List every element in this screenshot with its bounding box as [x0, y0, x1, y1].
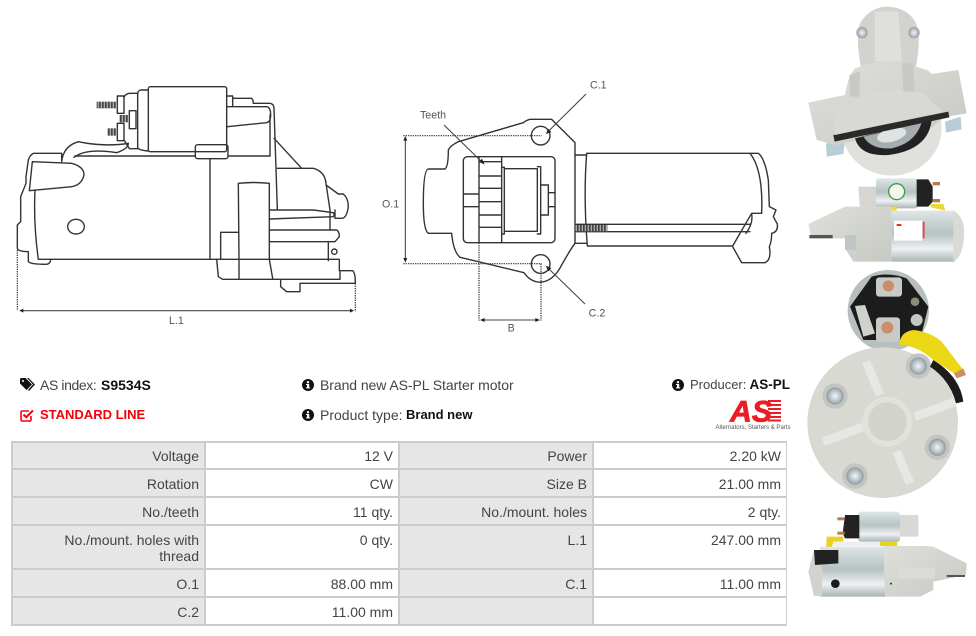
row: teeth and mounting holes: 11 qty. [353, 504, 393, 520]
row: rotation and size B: CW [370, 476, 393, 492]
callout C.2: C.2 [589, 308, 605, 320]
AS index: AS index: [40, 377, 96, 393]
flange [423, 119, 575, 282]
row: rotation and size B: Rotation [147, 476, 199, 492]
callout C.1 [546, 80, 607, 134]
row: teeth and mounting holes: No./teeth [142, 504, 199, 520]
row: teeth and mounting holes [13, 498, 786, 524]
product type: Brand new [406, 407, 472, 422]
row: threaded holes and L.1: 0 qty. [360, 532, 393, 548]
logo: AS-PL: Alternators, Starters & Parts [716, 425, 790, 431]
mounting holes [531, 126, 550, 273]
producer: AS-PL [750, 377, 790, 392]
product description: Brand new AS-PL Starter motor [320, 377, 514, 393]
row: voltage and power: Voltage [152, 448, 199, 464]
row: threaded holes and L.1: thread [159, 548, 199, 564]
logo: AS-PL [716, 398, 790, 431]
standard line badge: STANDARD LINE [40, 407, 145, 422]
icon: info [672, 379, 684, 391]
icon: info [302, 379, 314, 391]
row: voltage and power [13, 443, 786, 468]
row: C.2: C.2 [177, 604, 199, 620]
photo: side view lower [808, 512, 967, 597]
dimension O.1: O.1 [382, 199, 399, 211]
row: rotation and size B [13, 470, 786, 496]
row: teeth and mounting holes: 2 qty. [748, 504, 781, 520]
row: O.1 and C.1: C.1 [565, 576, 587, 592]
icon: tags [20, 378, 35, 391]
callout Teeth: Teeth [420, 110, 446, 122]
callout C.2 [546, 266, 605, 320]
row: rotation and size B: Size B [547, 476, 587, 492]
dimension L.1 [17, 250, 355, 327]
row: teeth and mounting holes: No./mount. holes [481, 504, 587, 520]
row: C.2: 11.00 mm [332, 604, 393, 620]
producer [672, 377, 790, 392]
row: O.1 and C.1: O.1 [176, 576, 199, 592]
product type: Product type: [320, 407, 402, 423]
row: C.2 [13, 598, 786, 624]
row: threaded holes and L.1: No./mount. holes with [64, 532, 199, 548]
producer: Producer: [690, 377, 746, 392]
row: voltage and power: 2.20 kW [730, 448, 781, 464]
pinion window [463, 157, 555, 243]
motor cylinder [575, 153, 777, 263]
row: voltage and power: 12 V [364, 448, 393, 464]
icon: checked square [20, 410, 34, 422]
product type [302, 407, 472, 423]
dimension B [479, 243, 541, 335]
front view technical drawing [382, 80, 777, 335]
specification table [11, 441, 787, 626]
photo: rear view [807, 270, 966, 498]
dimension O.1 [382, 136, 542, 264]
photo: top view [808, 7, 967, 176]
row: rotation and size B: 21.00 mm [719, 476, 781, 492]
dimension L.1: L.1 [169, 315, 184, 327]
row: threaded holes and L.1 [13, 526, 786, 568]
solenoid [97, 87, 277, 209]
row: O.1 and C.1 [13, 570, 786, 596]
drive housing [217, 138, 355, 292]
AS index [20, 377, 151, 393]
callout Teeth [420, 110, 485, 165]
motor body [17, 142, 217, 264]
row: O.1 and C.1: 11.00 mm [720, 576, 781, 592]
row: O.1 and C.1: 88.00 mm [331, 576, 393, 592]
row: threaded holes and L.1: 247.00 mm [711, 532, 781, 548]
photo: side view upper [808, 178, 964, 262]
callout C.1: C.1 [590, 80, 607, 92]
AS index: S9534S [101, 377, 151, 393]
row: threaded holes and L.1: L.1 [568, 532, 587, 548]
row: voltage and power: Power [547, 448, 587, 464]
icon: info [302, 409, 314, 421]
dimension B: B [508, 323, 515, 335]
